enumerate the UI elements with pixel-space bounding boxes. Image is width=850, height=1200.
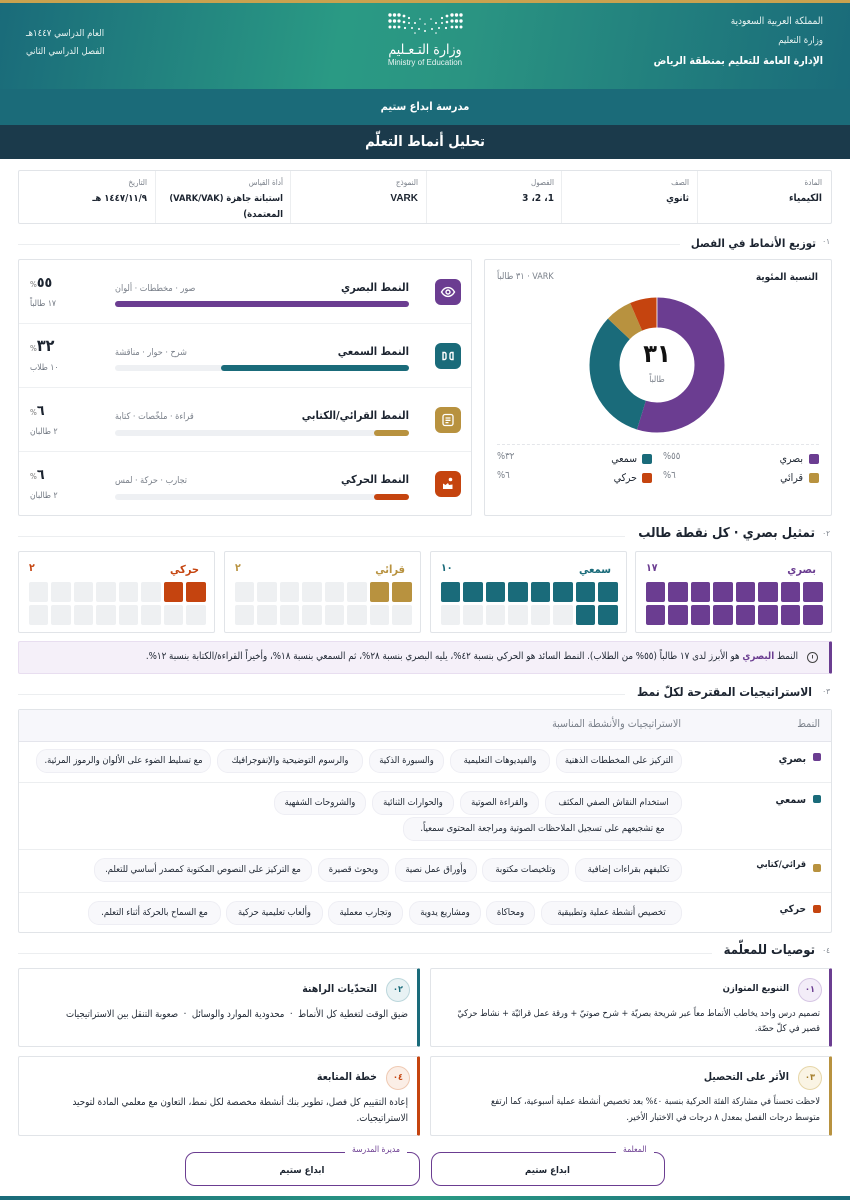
percent: reading: %٦ xyxy=(30,403,45,419)
chips: kinesthetic xyxy=(88,901,682,925)
row divider 3 xyxy=(19,892,831,893)
icon: hand xyxy=(435,471,461,497)
badge 03: ٠٣ xyxy=(805,1073,815,1083)
report title band xyxy=(0,125,850,159)
card: auditory dots xyxy=(430,551,627,633)
count: reading: ٢ طالبان xyxy=(30,427,58,437)
badge 04 xyxy=(386,1066,410,1090)
row divider 1 xyxy=(19,782,831,783)
field: subject: المادة xyxy=(804,178,822,187)
signature label: المعلمة xyxy=(623,1145,647,1155)
card: visual dots: ١٧ xyxy=(646,562,658,574)
card body: متوسط درجات الفصل بمعدل ٨ درجات في الاختبار الأخير. xyxy=(626,1112,820,1122)
card body: ضيق الوقت لتغطية كل الأنماط · محدودية الموارد والوسائل · صعوبة التنقل بين الاستراتيجيات xyxy=(66,1009,408,1020)
percent: visual: %٥٥ xyxy=(30,275,52,291)
icon: eye xyxy=(435,279,461,305)
callout text: النمط البصري هو الأبرز لدى ١٧ طالباً (٥٥% من الطلاب). النمط السائد هو الحركي بنسبة ٤٢%، يليه البصري بنسبة ٢٨%، ثم السمعي بنسبة ١٨%، وأخيراً القراءة/الكتابة بنسبة ١٢%. xyxy=(146,651,798,662)
card title: خطة المتابعة xyxy=(317,1071,377,1083)
info table xyxy=(18,170,832,224)
chips: auditory: والقراءة الصوتية xyxy=(471,797,528,808)
icon: document xyxy=(435,407,461,433)
ministry logo xyxy=(388,13,463,67)
heading: section 1: توزيع الأنماط في الفصل xyxy=(691,236,816,250)
signature: teacher xyxy=(431,1152,665,1186)
report title band: تحليل أنماط التعلّم xyxy=(365,134,485,150)
signature: principal xyxy=(185,1152,420,1186)
chips: auditory: مع تشجيعهم على تسجيل الملاحظات الصوتية ومراجعة المحتوى سمعياً. xyxy=(420,823,665,834)
panel title: النسبة المئوية xyxy=(756,272,818,283)
chips: kinesthetic: ومحاكاة xyxy=(497,907,524,918)
heading: section 3: ٠٣ xyxy=(822,687,830,696)
title: auditory: النمط السمعي xyxy=(338,345,409,358)
card: auditory dots: سمعي xyxy=(579,563,611,576)
chips: kinesthetic: مع السماح بالحركة أثناء التعلم. xyxy=(101,907,208,918)
chips: reading: وتلخيصات مكتوبة xyxy=(495,864,556,875)
chips: kinesthetic: وتجارب معملية xyxy=(339,907,392,918)
card title: التنويع المتوازن xyxy=(723,983,789,994)
card: visual dots: بصري xyxy=(787,563,816,576)
ministry text block: المملكة العربية السعودية xyxy=(731,16,823,27)
title: visual: النمط البصري xyxy=(341,281,409,294)
legend: visual: سمعي xyxy=(611,453,637,465)
donut chart xyxy=(590,298,724,432)
card: current challenges xyxy=(18,968,420,1047)
field: date xyxy=(92,178,147,204)
legend: visual: ٣٢% xyxy=(497,451,514,462)
logo english wordmark: Ministry of Education xyxy=(388,58,462,67)
row: visual xyxy=(19,260,471,324)
count: kinesthetic: ٢ طالبان xyxy=(30,491,58,501)
card: balanced diversification xyxy=(430,968,832,1047)
field: grade: ثانوي xyxy=(666,193,689,204)
signature label xyxy=(345,1143,407,1157)
chips: visual: مع تسليط الضوء على الألوان والرموز المرئية. xyxy=(44,755,203,766)
card: kinesthetic dots: حركي xyxy=(170,563,199,576)
chips: reading: وأوراق عمل نصية xyxy=(405,864,467,875)
field: grade: الصف xyxy=(671,178,689,187)
row: kinesthetic xyxy=(30,467,409,501)
card body: الاستراتيجيات. xyxy=(356,1112,408,1124)
field: model xyxy=(390,178,418,204)
signature name: ابداع ستيم xyxy=(525,1165,570,1176)
heading: section 3 xyxy=(18,685,830,699)
heading: section 2: تمثيل بصري · كل نقطة طالب xyxy=(638,526,815,541)
field: grade xyxy=(666,178,689,204)
school name band: مدرسة ابداع ستيم xyxy=(381,100,469,113)
row divider 2 xyxy=(19,849,831,850)
academic year text block: العام الدراسي ١٤٤٧هـ xyxy=(26,28,104,39)
badge 04: ٠٤ xyxy=(393,1073,403,1083)
card: reading dots: ٢ xyxy=(235,562,241,574)
descriptor: reading: قراءة · ملخّصات · كتابة xyxy=(115,412,194,422)
chips: auditory: استخدام النقاش الصفي المكثف xyxy=(558,797,669,808)
field: measurement tool: المعتمدة) xyxy=(243,209,283,220)
field: model: النموذج xyxy=(396,178,418,187)
card: kinesthetic dots: ٢ xyxy=(29,562,35,574)
chips: visual: التركيز على المخططات الذهنية xyxy=(565,755,673,766)
heading: section 4: ٠٤ xyxy=(822,946,830,955)
card: visual dots xyxy=(635,551,832,633)
signature label: مديرة المدرسة xyxy=(352,1145,400,1155)
strategies table xyxy=(18,709,832,933)
chips: kinesthetic: ومشاريع يدوية xyxy=(420,907,470,918)
field: measurement tool: أداة القياس xyxy=(249,178,283,187)
legend: visual xyxy=(497,451,819,465)
progress bar: reading xyxy=(115,430,409,436)
badge 02 xyxy=(386,978,410,1002)
chips: visual: والرسوم التوضيحية والإنفوجرافيك xyxy=(232,755,348,766)
chips: auditory: والشروحات الشفهية xyxy=(285,797,355,808)
chips: auditory xyxy=(274,791,682,841)
heading: section 2 xyxy=(18,526,830,541)
badge 02: ٠٢ xyxy=(393,985,403,995)
legend: reading: حركي xyxy=(614,472,637,484)
heading: section 1: ٠١ xyxy=(822,237,830,246)
donut caption: طالباً xyxy=(649,375,665,385)
unit grid: kinesthetic xyxy=(29,582,206,625)
progress bar: auditory xyxy=(115,365,409,371)
legend: reading: ٦% xyxy=(663,470,676,481)
field: classes xyxy=(522,178,554,204)
legend: reading: ٦% xyxy=(497,470,510,481)
unit grid: visual xyxy=(646,582,823,625)
card title: التحدّيات الراهنة xyxy=(302,983,377,995)
footer strip xyxy=(0,1196,850,1200)
chips: kinesthetic: وألعاب تعليمية حركية xyxy=(238,907,311,918)
card: reading dots: قرائي xyxy=(375,563,405,576)
card body: تصميم درس واحد يخاطب الأنماط معاً عبر شريحة بصريّة + شرح صوتيّ + ورقة عمل قرائيّة + نشاط حركيّ قصير في كلّ حصّة. xyxy=(457,1009,820,1034)
chips: visual: والسبورة الذكية xyxy=(379,755,434,766)
field: classes: الفصول xyxy=(531,178,554,187)
percent: kinesthetic: %٦ xyxy=(30,467,45,483)
row: auditory xyxy=(19,324,471,388)
heading: section 4 xyxy=(18,940,830,958)
unit grid: auditory xyxy=(441,582,618,625)
row label: reading: قرائي/كتابي xyxy=(756,860,806,870)
academic year text block: الفصل الدراسي الثاني xyxy=(26,46,105,57)
unit grid: reading xyxy=(235,582,412,625)
card title: الأثر على التحصيل xyxy=(704,1071,789,1083)
title: reading: النمط القرائي/الكتابي xyxy=(302,409,409,422)
chips: visual: والفيديوهات التعليمية xyxy=(464,755,536,766)
chips: reading: وبحوث قصيرة xyxy=(329,864,378,875)
card body xyxy=(491,1094,820,1122)
field: measurement tool xyxy=(169,177,283,220)
descriptor: kinesthetic: تجارب · حركة · لمس xyxy=(115,476,187,486)
table header: الاستراتيجيات والأنشطة المناسبة xyxy=(552,718,681,730)
chips: auditory: والحوارات الثنائية xyxy=(383,797,443,808)
chips: reading xyxy=(94,858,682,882)
school name band xyxy=(0,89,850,125)
badge 03 xyxy=(798,1066,822,1090)
title: kinesthetic: النمط الحركي xyxy=(341,473,409,486)
chips: kinesthetic: تخصيص أنشطة عملية وتطبيقية xyxy=(557,907,666,918)
panel: learning style rows xyxy=(18,259,472,516)
ministry text block xyxy=(654,16,823,67)
ministry text block: وزارة التعليم xyxy=(778,35,823,46)
heading: section 2: ٠٢ xyxy=(822,529,830,538)
row label: auditory: سمعي xyxy=(775,794,806,806)
row label: visual xyxy=(779,753,821,765)
card: achievement impact xyxy=(430,1056,832,1136)
header banner xyxy=(0,0,850,159)
card: auditory dots: ١٠ xyxy=(441,562,453,574)
callout xyxy=(18,641,832,674)
descriptor: auditory: شرح · حوار · مناقشة xyxy=(115,348,187,358)
academic year text block xyxy=(26,28,105,57)
field: model: VARK xyxy=(390,193,418,204)
card: kinesthetic dots xyxy=(18,551,215,633)
legend: reading xyxy=(497,470,819,484)
count: visual: ١٧ طالباً xyxy=(30,299,56,309)
row label: kinesthetic: حركي xyxy=(780,904,806,915)
legend: visual: ٥٥% xyxy=(663,451,680,462)
donut total: ٣١ xyxy=(643,339,671,368)
card body xyxy=(72,1096,408,1124)
row: reading xyxy=(19,388,471,452)
descriptor: visual: صور · مخططات · ألوان xyxy=(115,284,195,294)
card: follow-up plan xyxy=(18,1056,420,1136)
panel: percentage donut xyxy=(484,259,832,516)
count: auditory: ١٠ طلاب xyxy=(30,363,58,373)
row label: visual: بصري xyxy=(779,753,806,765)
table header xyxy=(19,710,831,742)
field: classes: 1، 2، 3 xyxy=(522,193,554,204)
progress bar: visual xyxy=(115,301,409,307)
panel meta: VARK · ٣١ طالباً xyxy=(497,272,554,282)
legend: reading: قرائي xyxy=(780,472,803,484)
field: measurement tool: استبانة جاهزة (VARK/VAK) xyxy=(169,193,283,204)
field: date: ١٤٤٧/١١/٩ هـ xyxy=(92,193,147,204)
icon: logo dots xyxy=(388,13,463,34)
field: subject xyxy=(789,178,822,204)
row label: reading xyxy=(756,860,821,872)
card body: لاحظت تحسناً في مشاركة الفئة الحركية بنسبة ٤٠% بعد تخصيص أنشطة عملية أسبوعية، كما ارتفع xyxy=(491,1097,820,1107)
signature name: ابداع ستيم xyxy=(280,1165,324,1176)
field: date: التاريخ xyxy=(128,178,147,187)
legend divider xyxy=(497,444,819,445)
progress bar: kinesthetic xyxy=(115,494,409,500)
badge 01: ٠١ xyxy=(805,985,815,995)
ministry gradient band xyxy=(0,3,850,89)
legend xyxy=(497,451,819,484)
badge 01 xyxy=(798,978,822,1002)
row label: kinesthetic xyxy=(780,904,821,915)
gold top strip xyxy=(0,0,850,3)
cell dividers xyxy=(155,171,156,223)
field: subject: الكيمياء xyxy=(789,193,822,204)
logo arabic wordmark: وزارة التـعـليم xyxy=(388,42,462,58)
legend: visual: بصري xyxy=(780,453,803,465)
chips: reading: مع التركيز على النصوص المكتوبة كمصدر أساسي للتعلم. xyxy=(105,864,301,875)
row label: auditory xyxy=(775,794,821,806)
icon: headphones xyxy=(435,343,461,369)
heading: section 4: توصيات للمعلّمة xyxy=(724,943,815,958)
table header: النمط xyxy=(797,718,820,730)
chips: reading: تكليفهم بقراءات إضافية xyxy=(588,864,669,875)
chips: visual xyxy=(36,749,682,773)
icon: info xyxy=(807,652,818,663)
ministry text block: الإدارة العامة للتعليم بمنطقة الرياض xyxy=(654,55,823,67)
card: reading dots xyxy=(224,551,421,633)
heading: section 1 xyxy=(18,236,830,250)
card body: إعادة التقييم كل فصل، تطوير بنك أنشطة مخصصة لكل نمط، التعاون مع معلمي المادة لتوحيد xyxy=(72,1097,408,1108)
percent: auditory: %٣٢ xyxy=(30,336,54,355)
heading: section 3: الاستراتيجيات المقترحة لكلّ نمط xyxy=(637,685,812,699)
signature label xyxy=(616,1143,654,1157)
